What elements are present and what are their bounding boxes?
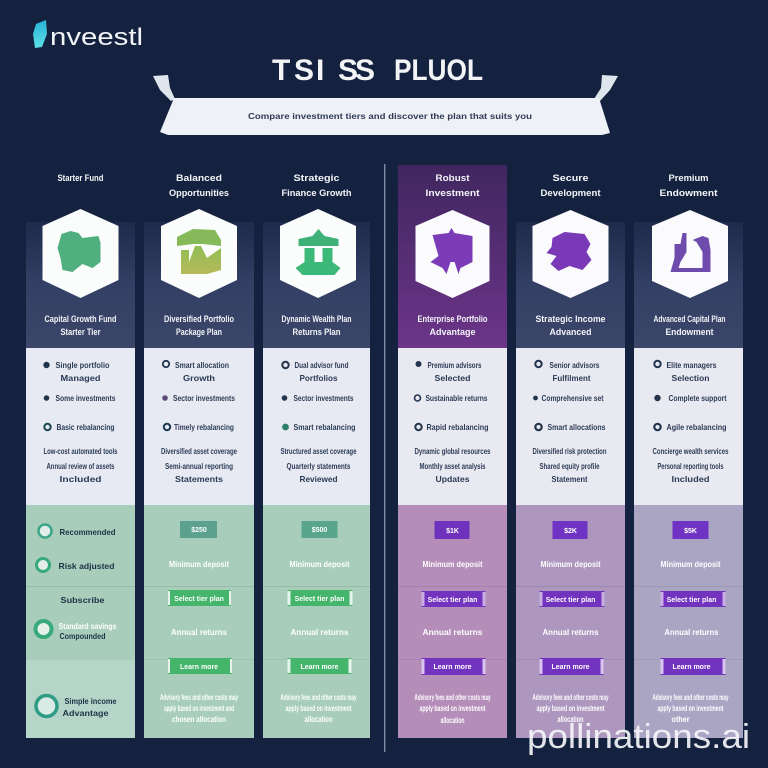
column 6 feature list [652,360,729,484]
column 5 second button: Learn more [551,664,590,671]
column 1 feature list: Some investments [56,393,116,403]
column 4 second button [422,658,486,675]
column 6 second button: Learn more [672,664,711,671]
column 3 second button [288,658,352,674]
column 3 white panel [263,348,370,505]
column 3 label: Strategic [294,173,340,183]
column 3 header panel [263,222,370,348]
column 4 white panel [398,348,507,505]
column 2 [144,173,254,738]
column 3 label: Finance Growth [282,188,352,198]
column 5 note: allocation [558,715,584,724]
column 4 badge: $1K [446,528,459,535]
logo: nveestl [50,24,143,51]
column 2 label [169,173,229,198]
column 4 second rate: Annual returns [422,628,483,637]
column 3 feature list [280,360,357,484]
column 2 feature list [161,360,237,484]
column 5 badge: $2K [564,528,577,535]
column 6 feature list: Selection [672,373,710,383]
column 5 feature list: Smart allocations [548,422,606,432]
column 3 label [282,173,352,198]
column 5 badge [552,521,588,539]
column 3 feature list: Quarterly statements [286,461,351,471]
logo [33,20,143,51]
column 3 [263,173,370,738]
column 3 note: Advisory fees and other costs may [280,693,357,702]
column 1 lower panel [26,505,135,738]
watermark: pollinations.ai [527,718,750,756]
column 1 label: Starter Fund [58,173,104,183]
column 4 note: allocation [440,716,465,725]
column 1 [26,173,135,738]
column 4 hexagon icon [416,210,490,298]
column 2 note: chosen allocation [172,715,226,724]
title: TSISS [272,54,375,87]
column 3 lower panel [263,505,370,738]
column 5 first button: Select tier plan [546,597,595,604]
column 6 header panel [634,222,743,348]
column 2 feature list: Smart allocation [175,360,229,370]
column 4 second button: Learn more [433,664,472,671]
column 2 feature list: Timely rebalancing [174,422,234,432]
column 5 first rate: Minimum deposit [540,560,601,569]
column 4 header text: Advantage [430,327,476,337]
column 3 note: apply based on investment [286,704,352,713]
column 1 feature list: Single portfolio [56,360,110,370]
column 3 first button: Select tier plan [295,596,344,603]
column 5 first button [540,591,604,607]
column 2 feature list: Growth [183,373,215,383]
column 3 note: allocation [304,715,333,724]
column 2 feature list: Statements [175,474,223,484]
column 5 [516,173,625,738]
column 6 first button: Select tier plan [667,597,716,604]
column 3 header text: Returns Plan [292,327,340,337]
column 2 badge [180,521,217,538]
column 4 feature list: Sustainable returns [426,393,488,403]
column 6 badge [672,521,708,539]
banner: Compare investment tiers and discover the plan that suits you [248,111,532,121]
column 5 label: Development [541,188,601,198]
title: PLUOL [394,54,483,87]
column 1 feature list [43,360,118,484]
column 2 lower panel [144,505,254,738]
column 4 feature list: Updates [436,474,470,484]
column 2 header text [164,314,234,337]
column 3 feature list: Sector investments [294,393,354,403]
column 1 offers: Standard savings [58,622,117,631]
column 3 second rate: Annual returns [290,628,349,637]
column 4 label: Robust [436,173,470,183]
column 3 badge [302,521,338,538]
column 1 hexagon icon [42,209,118,298]
column 2 second button [168,658,232,674]
column 1 feature list: Low-cost automated tools [44,446,118,456]
column 2 note [160,693,238,724]
column 5 second button [540,658,604,675]
column 5 header text: Advanced [550,327,592,337]
column 6 white panel [634,348,743,505]
column 5 feature list [532,360,606,484]
column 5 feature list: Senior advisors [550,360,600,370]
column 5 feature list: Fulfilment [552,373,591,383]
column 3 first button [288,590,352,606]
column 6 header text: Endowment [666,327,714,337]
column 4 first button: Select tier plan [428,597,477,604]
column 6 label: Endowment [659,188,718,198]
column 2 feature list: Diversified asset coverage [161,446,237,456]
column 5 label: Secure [552,173,588,183]
column 6 note [652,693,729,724]
column 4 [398,165,507,738]
column 4 header text [418,314,488,337]
column 6 second button [660,658,726,675]
column 2 header text: Package Plan [176,327,222,337]
column 6 feature list: Personal reporting tools [658,461,724,471]
column 2 first button: Select tier plan [174,596,224,603]
column 4 lower panel [398,505,507,738]
column 3 second button: Learn more [300,664,339,671]
column 6 feature list: Included [672,474,710,484]
column 5 feature list: Comprehensive set [542,393,604,403]
column 2 header panel [144,222,254,348]
column 2 badge: $250 [191,527,207,534]
column 6 header text [654,314,726,337]
column 3 feature list: Reviewed [300,474,338,484]
column 6 second rate: Annual returns [664,628,719,637]
column 4 feature list: Monthly asset analysis [420,461,486,471]
column 4 first button [422,591,486,607]
column 6 feature list: Complete support [668,393,727,403]
column 5 header panel [516,222,625,348]
column 6 feature list: Concierge wealth services [652,446,729,456]
column 1 offers: Subscribe [60,595,105,605]
column 5 label [540,173,601,198]
column 2 first button [168,590,231,606]
column divider [384,164,385,752]
column 3 header text: Dynamic Wealth Plan [282,314,352,324]
column 4 note: Advisory fees and other costs may [414,693,491,702]
column 2 first rate: Minimum deposit [169,560,229,569]
column 3 badge: $500 [312,527,327,534]
column 4 label [426,173,480,198]
column 5 white panel [516,348,625,505]
column 5 note: Advisory fees and other costs may [532,693,609,702]
column 6 header text: Advanced Capital Plan [654,314,726,324]
column 5 feature list: Statement [552,474,588,484]
column 1 feature list: Managed [60,373,100,383]
column 2 second button: Learn more [180,664,218,671]
column 5 lower panel [516,505,625,738]
column 2 hexagon icon [161,209,237,298]
column 3 feature list: Smart rebalancing [294,422,356,432]
column 2 white panel [144,348,254,505]
column 4 note: apply based on investment [420,704,486,713]
title [272,54,483,87]
column 4 label: Investment [426,188,480,198]
column 1 header text [44,314,116,337]
column 6 feature list: Agile rebalancing [666,422,726,432]
column 6 feature list: Elite managers [666,360,717,370]
column 5 note: apply based on investment [536,704,605,713]
column 4 header text: Enterprise Portfolio [418,314,488,324]
column 4 feature list: Selected [434,373,470,383]
column 6 badge: $5K [684,528,697,535]
column 1 feature list: Included [60,474,102,484]
column 3 first rate: Minimum deposit [290,560,350,569]
column 6 note: apply based on investment [658,704,724,713]
column 5 feature list: Shared equity profile [540,461,600,471]
column 2 second rate: Annual returns [171,628,228,637]
column 3 feature list: Structured asset coverage [280,446,357,456]
column 6 first rate: Minimum deposit [660,560,721,569]
column 4 first rate: Minimum deposit [422,560,483,569]
column 2 label: Opportunities [169,188,229,198]
column 5 header text: Strategic Income [536,314,606,324]
column 4 feature list: Premium advisors [428,360,482,370]
column 6 first button [660,591,726,607]
column 2 note: Advisory fees and other costs may [160,693,238,702]
column 6 lower panel [634,505,743,738]
column 2 feature list: Semi-annual reporting [165,461,233,471]
column 2 header text: Diversified Portfolio [164,314,234,324]
column 1 offers: Compounded [60,631,106,641]
column 5 second rate: Annual returns [542,628,599,637]
column 5 note [532,693,609,724]
column 6 note: other [672,715,690,724]
column 6 label [660,173,718,198]
banner [153,75,618,135]
column 4 feature list: Dynamic global resources [414,446,491,456]
column 6 hexagon icon [652,210,728,298]
column 3 note [280,693,357,724]
column 4 header panel [398,165,507,348]
column 1 feature list: Annual review of assets [46,461,115,471]
column 3 header text [282,314,352,337]
column 6 [634,173,743,738]
column 4 feature list: Rapid rebalancing [426,422,488,432]
column 3 hexagon icon [280,209,356,298]
column 3 feature list: Dual advisor fund [294,360,348,370]
column 1 white panel [26,348,135,505]
column 1 offers: Advantage [62,708,109,718]
column 3 feature list: Portfolios [300,373,338,383]
column 2 note: apply based on investment and [164,704,234,713]
column 6 label: Premium [668,173,708,183]
column 5 feature list: Diversified risk protection [532,446,606,456]
column 1 header text: Capital Growth Fund [44,314,116,324]
column 4 feature list [414,360,491,484]
column 4 note [414,693,491,725]
column 1 offers: Recommended [60,527,116,537]
column 1 offers: Risk adjusted [58,561,114,571]
column 1 header panel [26,222,135,348]
column 5 header text [536,314,606,337]
column 2 label: Balanced [176,173,222,183]
column 1 offers [36,524,117,718]
column 1 offers: Simple income [64,696,117,706]
column 1 header text: Starter Tier [60,327,101,337]
column 5 hexagon icon [532,210,608,298]
column 2 feature list: Sector investments [173,393,235,403]
column 4 badge [434,521,470,539]
column 1 feature list: Basic rebalancing [56,422,114,432]
